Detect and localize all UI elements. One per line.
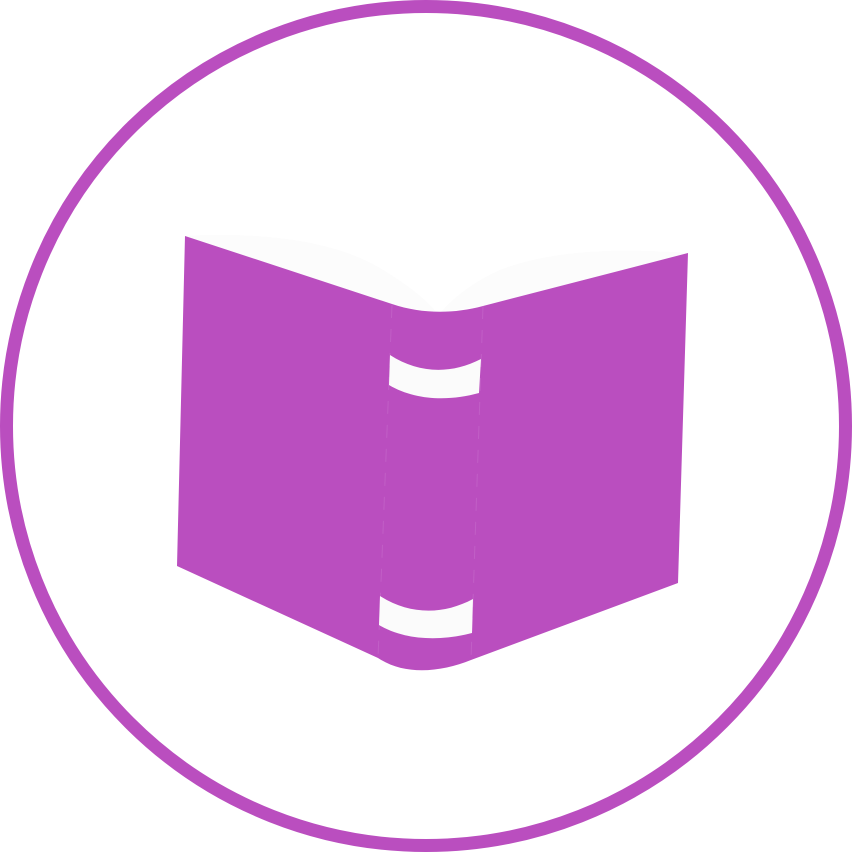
book cover: [177, 236, 688, 670]
left page edge: [185, 235, 436, 312]
spine band bottom: [379, 596, 473, 638]
spine band top: [389, 355, 481, 398]
right page edge: [441, 251, 688, 312]
spine fold lines: [378, 305, 483, 660]
icon: open book: [177, 235, 688, 670]
